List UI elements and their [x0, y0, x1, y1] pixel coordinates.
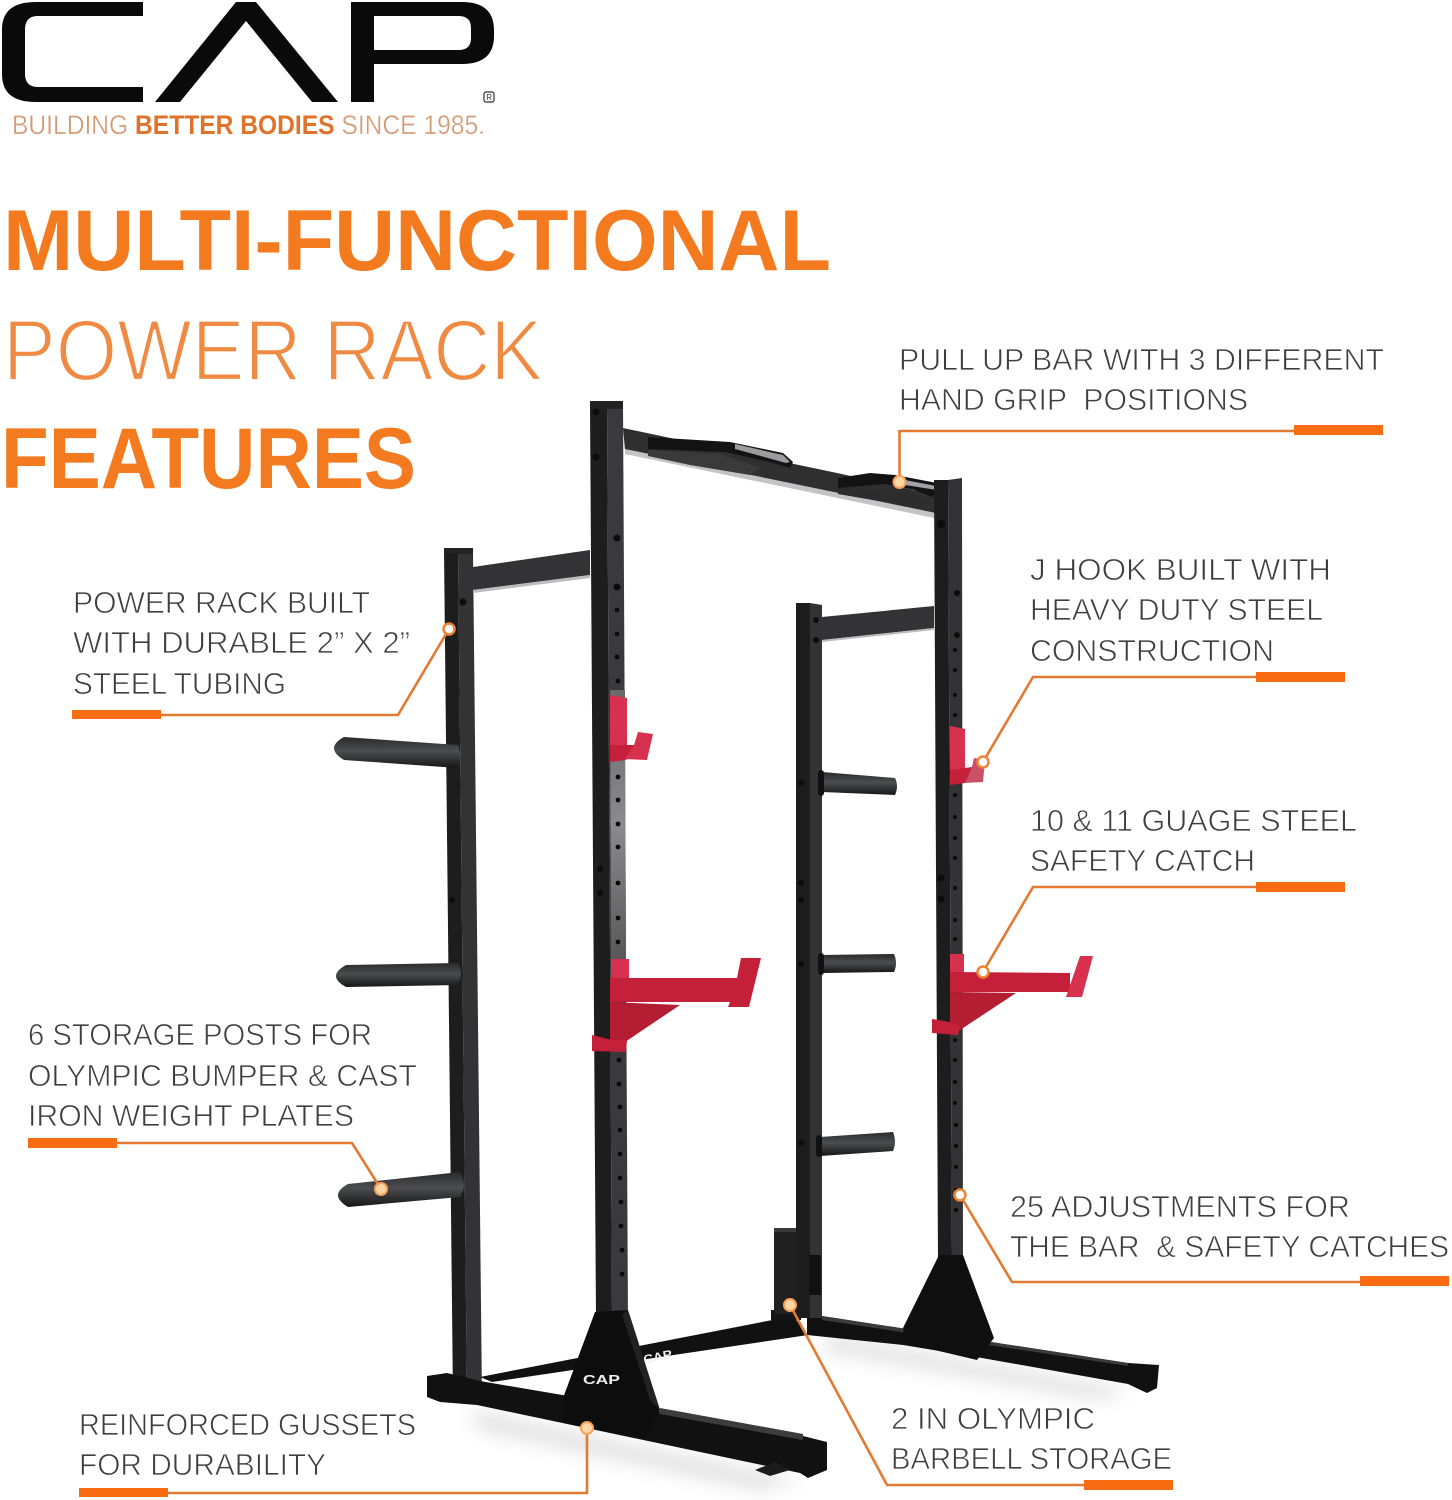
title line 2: POWER RACK	[3, 303, 543, 399]
marker dot	[581, 1422, 593, 1434]
CAP logo	[2, 2, 494, 102]
leader bar	[72, 710, 161, 719]
logo letter P	[351, 2, 494, 102]
rear left storage posts	[334, 737, 464, 1207]
label text: POWER RACK BUILT	[73, 585, 370, 620]
callout: barbell storage	[784, 1299, 1173, 1490]
callout: J hook	[978, 552, 1345, 768]
label text: REINFORCED GUSSETS	[79, 1407, 416, 1442]
label text	[1030, 803, 1357, 878]
callout: gussets	[79, 1407, 593, 1497]
rear base beam	[480, 1316, 808, 1382]
label text: WITH DURABLE 2” X 2”	[73, 625, 410, 660]
label text: J HOOK BUILT WITH	[1030, 552, 1331, 587]
label text	[73, 585, 410, 701]
right base beam	[807, 1316, 1159, 1393]
leader bar	[1256, 882, 1345, 892]
label text: 2 IN OLYMPIC	[891, 1401, 1095, 1436]
right safety catch	[932, 954, 1093, 1035]
front right post	[934, 478, 963, 1262]
leader line	[28, 1143, 381, 1189]
leader line	[79, 1428, 587, 1493]
label text: 25 ADJUSTMENTS FOR	[1010, 1189, 1350, 1224]
marker dot	[375, 1183, 387, 1195]
callout: steel tubing	[72, 585, 454, 719]
rear left post	[444, 548, 482, 1400]
front base beam with feet	[427, 1373, 827, 1478]
callout: storage posts	[28, 1017, 417, 1195]
label text: 10 & 11 GUAGE STEEL	[1030, 803, 1357, 838]
label text: 6 STORAGE POSTS FOR	[28, 1017, 372, 1052]
label text	[1030, 552, 1331, 668]
label text: THE BAR & SAFETY CATCHES	[1010, 1229, 1449, 1264]
leader bar	[1256, 672, 1345, 682]
front left post	[590, 401, 628, 1320]
callout: pull up bar	[894, 342, 1384, 488]
floor shadows	[470, 1335, 1130, 1490]
marker dot	[894, 476, 906, 488]
left J hook	[610, 695, 653, 762]
logo tagline: BUILDING BETTER BODIES SINCE 1985.	[12, 110, 485, 140]
leader bar	[1294, 425, 1383, 435]
label text: BARBELL STORAGE	[891, 1441, 1172, 1476]
label text	[1010, 1189, 1449, 1264]
rear right storage posts	[816, 770, 897, 1157]
title line 3: FEATURES	[1, 411, 416, 507]
callout: safety catch	[978, 803, 1357, 978]
registered mark	[484, 92, 494, 102]
logo letter A chevron	[155, 2, 338, 102]
label text: HEAVY DUTY STEEL	[1030, 592, 1323, 627]
label text: HAND GRIP POSITIONS	[899, 382, 1248, 417]
label text: OLYMPIC BUMPER & CAST	[28, 1058, 417, 1093]
right grip handle	[838, 488, 933, 507]
label text: IRON WEIGHT PLATES	[28, 1098, 354, 1133]
leader bar	[79, 1488, 168, 1497]
left safety catch	[592, 958, 761, 1052]
leader line	[983, 887, 1345, 972]
label text: SAFETY CATCH	[1030, 843, 1255, 878]
callout: adjustments	[954, 1189, 1449, 1286]
label text	[899, 342, 1384, 417]
logo letter C	[2, 2, 143, 102]
front left gusset with logo	[563, 1310, 660, 1438]
leader line	[960, 1195, 1449, 1282]
leader bar	[28, 1138, 117, 1148]
registered mark: R	[486, 93, 492, 102]
beam logo: CAP	[642, 1347, 673, 1367]
marker dot	[784, 1299, 796, 1311]
rear right connector bar	[822, 606, 934, 642]
right J hook	[950, 726, 985, 785]
right gusset	[903, 1255, 994, 1360]
pull up bar	[623, 428, 940, 518]
leader line	[983, 677, 1345, 762]
leader bar	[1360, 1276, 1449, 1286]
label text	[79, 1407, 416, 1482]
label text: STEEL TUBING	[73, 666, 286, 701]
label text	[28, 1017, 417, 1133]
leader line	[900, 431, 1383, 482]
left grip handle	[648, 450, 760, 475]
label text: PULL UP BAR WITH 3 DIFFERENT	[899, 342, 1384, 377]
label text	[891, 1401, 1172, 1476]
leader line	[72, 629, 449, 715]
power rack product illustration	[334, 401, 1159, 1490]
title	[1, 193, 831, 507]
marker dot	[444, 624, 454, 634]
leader line	[790, 1305, 1173, 1485]
title line 1: MULTI-FUNCTIONAL	[3, 193, 831, 289]
crossbar	[623, 428, 937, 514]
label text: CONSTRUCTION	[1030, 633, 1274, 668]
rear right post	[796, 603, 822, 1318]
rear left connector bar	[473, 550, 590, 593]
label text: FOR DURABILITY	[79, 1447, 326, 1482]
marker dot	[978, 756, 988, 768]
barbell storage tube	[771, 1228, 801, 1320]
marker dot	[954, 1190, 966, 1200]
leader bar	[1084, 1480, 1173, 1490]
marker dot	[978, 966, 988, 978]
front left gusset with logo: CAP	[583, 1372, 620, 1387]
